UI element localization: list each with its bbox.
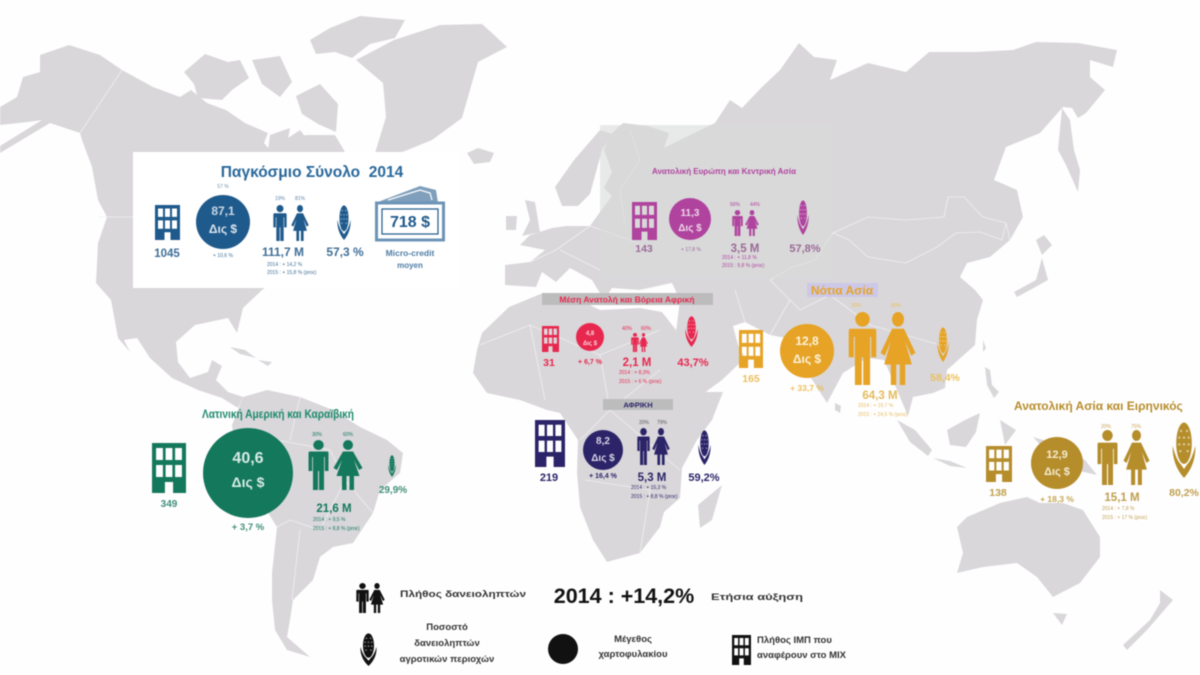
panel: Africa: 219 (540, 472, 558, 484)
panel: global total 2014: + 10,6 % (213, 253, 233, 259)
panel: South Asia: 20% (851, 303, 862, 309)
map: Arctic islands (184, 16, 405, 152)
portfolio circle: 87,1 (211, 204, 235, 218)
icon: building (542, 326, 559, 352)
panel: global total 2014: 57,3 % (326, 245, 364, 259)
portfolio circle: 8,2 (596, 436, 610, 447)
panel: Africa: 20% (639, 420, 650, 426)
panel: Africa: 59,2% (688, 472, 720, 484)
legend: portfolio size: χαρτοφυλακίου (599, 649, 668, 660)
panel: global total 2014: moyen (397, 261, 423, 270)
panel: South Asia: 58,4% (930, 372, 961, 384)
panel: East Asia and Pacific: 80,2% (1169, 487, 1200, 499)
icon: borrowers (732, 210, 759, 236)
map: Japan (1014, 235, 1052, 297)
legend: rural share: δανειοληπτών (414, 638, 480, 649)
panel: Africa: + 16,4 % (589, 473, 618, 480)
icon: building (986, 446, 1012, 482)
panel: global total 2014 (133, 152, 460, 288)
map: Greenland (356, 24, 507, 153)
portfolio circle: Δις $ (209, 222, 237, 236)
panel: Eastern Europe and Central Asia: 2014 : + 11,8 % (722, 255, 757, 261)
portfolio circle: 40,6 (232, 450, 264, 467)
panel: South Asia: 80% (891, 303, 902, 309)
legend: portfolio size (548, 634, 668, 664)
portfolio circle (196, 195, 250, 249)
panel: Latin America and Caribbean: 60% (343, 432, 354, 438)
panel: Africa: 5,3 M (638, 472, 666, 484)
icon: borrowers (273, 205, 309, 241)
legend: number of institutions (732, 635, 847, 665)
panel: Eastern Europe and Central Asia: 143 (635, 243, 653, 255)
portfolio circle: 12,9 (1046, 449, 1068, 461)
portfolio circle: Δις $ (793, 352, 821, 366)
panel: East Asia and Pacific: + 18,3 % (1040, 494, 1074, 504)
map: New Zealand (1123, 590, 1173, 650)
icon: building (155, 205, 180, 240)
heading: Ανατολική Ευρώπη και Κεντρική Ασία (652, 167, 796, 176)
portfolio circle (576, 323, 604, 351)
icon: corn (1173, 423, 1195, 478)
legend: borrowers (356, 583, 526, 613)
panel: Eastern Europe and Central Asia: 2015 : 9,8 % (proε) (722, 263, 765, 269)
icon: building (632, 202, 657, 240)
panel: Latin America and Caribbean: 21,6 M (316, 503, 352, 515)
panel: Latin America and Caribbean: 30% (312, 432, 323, 438)
panel: South Asia: 2015 : + 24,5 % (proε) (858, 412, 908, 418)
heading: Ανατολική Ασία και Ειρηνικός (1014, 399, 1183, 413)
panel: Latin America and Caribbean: + 3,7 % (232, 522, 265, 533)
panel: Middle East and North Africa: 60% (641, 326, 652, 332)
legend: rural share: αγροτικών περιοχών (400, 654, 494, 665)
portfolio circle: 11,3 (681, 208, 700, 219)
portfolio circle (1031, 437, 1083, 489)
map: Madagascar (698, 485, 722, 528)
heading bar: Μέση Ανατολή και Βόρεια Αφρική (559, 294, 695, 304)
legend: rural share: Ποσοστό (426, 622, 468, 633)
panel: East Asia and Pacific: 75% (1131, 424, 1142, 430)
panel: Africa (535, 399, 720, 500)
map: New Guinea (1033, 437, 1097, 475)
portfolio circle: 4,8 (586, 331, 595, 337)
portfolio circle: Δις $ (591, 453, 615, 464)
map: South America (232, 390, 403, 657)
panel: Middle East and North Africa (542, 293, 713, 385)
icon: building (152, 443, 186, 493)
icon: banknotes (376, 186, 444, 240)
panel: East Asia and Pacific: 20% (1101, 424, 1112, 430)
panel: global total 2014: 81% (295, 196, 306, 202)
panel: Latin America and Caribbean: 2014 : + 9,5 % (313, 517, 346, 523)
icon: banknotes: 718 $ (390, 214, 430, 231)
panel: global total 2014: 111,7 M (262, 245, 304, 259)
panel: East Asia and Pacific: 2014 : + 7,8 % (1102, 506, 1135, 512)
legend (356, 583, 847, 666)
panel: Middle East and North Africa: 2015 : + 6 % (proε) (619, 379, 662, 385)
panel: Latin America and Caribbean: 29,9% (379, 485, 407, 496)
panel: global total 2014: 19% (275, 196, 286, 202)
panel: Middle East and North Africa: + 6,7 % (578, 359, 603, 366)
panel: Eastern Europe and Central Asia: 57,8% (789, 243, 821, 255)
icon: borrowers (309, 440, 362, 490)
panel: global total 2014: 57 % (217, 184, 229, 190)
panel: East Asia and Pacific: 15,1 M (1104, 492, 1140, 504)
map: Scandinavia (555, 130, 612, 206)
panel: global total 2014: Micro-credit (386, 248, 434, 258)
panel: Africa: 2015 : + 8,8 % (proε) (631, 494, 678, 500)
panel: Middle East and North Africa: 2,1 M (623, 357, 651, 369)
heading: global total: Παγκόσμιο Σύνολο 2014 (221, 164, 404, 181)
map: Tasmania (1053, 613, 1067, 625)
panel: Latin America and Caribbean: 349 (161, 499, 178, 510)
map: Australia (957, 497, 1100, 597)
panel: South Asia (739, 283, 961, 418)
legend: portfolio size: Μέγεθος (614, 634, 652, 645)
panel: East Asia and Pacific (986, 399, 1200, 521)
icon: borrowers (849, 312, 915, 385)
map: Philippines (985, 367, 999, 398)
panel: Eastern Europe and Central Asia: 44% (750, 202, 761, 208)
portfolio circle: Δις $ (678, 223, 702, 234)
heading bar (542, 293, 713, 305)
legend: borrowers: Πλήθος δανειοληπτών (400, 589, 526, 600)
panel: South Asia: 165 (742, 373, 760, 385)
map: Iceland (467, 148, 494, 164)
panel: East Asia and Pacific: 138 (989, 487, 1007, 499)
faint overlay of the Eastern Europe panel (600, 125, 832, 278)
icon: corn (685, 316, 698, 347)
panel: global total 2014: 2014 : + 14,2 % (267, 262, 303, 268)
panel: Latin America and Caribbean: 2015 : + 8,8 % (proε) (313, 526, 360, 532)
panel: Eastern Europe and Central Asia: + 17,8 % (681, 247, 701, 253)
legend: rural share (360, 622, 494, 666)
map: Britain and Ireland (506, 200, 540, 236)
portfolio circle: Δις $ (583, 341, 598, 347)
portfolio circle (583, 430, 623, 470)
icon: borrowers (637, 428, 670, 465)
panel: Eastern Europe and Central Asia (632, 167, 821, 269)
icon: corn (388, 455, 396, 477)
panel: South Asia: 64,3 M (862, 390, 898, 402)
panel: South Asia: + 33,7 % (790, 383, 824, 393)
panel: Middle East and North Africa: 2014 : + 8,3% (619, 370, 651, 376)
map: Africa (473, 293, 723, 562)
heading: Λατινική Αμερική και Καραϊβική (202, 407, 354, 421)
portfolio circle: Δις $ (232, 474, 265, 490)
panel: Middle East and North Africa: 31 (543, 357, 555, 369)
panel: South Asia: 2014 : + 19,7 % (858, 403, 894, 409)
legend: annual growth label: Ετήσια αύξηση (711, 592, 803, 603)
portfolio circle (780, 324, 834, 378)
map: Sakhalin (1058, 108, 1080, 192)
legend: number of institutions: αναφέρουν στο ΜΙΧ (757, 650, 847, 661)
icon: corn (797, 200, 809, 235)
heading bar: ΑΦΡΙΚΗ (623, 400, 653, 410)
map: Sri Lanka and Taiwan (835, 340, 986, 413)
icon: corn (937, 327, 949, 362)
number of institutions: 1045 (154, 248, 180, 260)
portfolio circle (669, 198, 711, 240)
legend: number of institutions: Πλήθος ΙΜΠ που (757, 635, 832, 646)
portfolio circle (203, 428, 293, 518)
icon: building (535, 420, 565, 467)
panel: Eastern Europe and Central Asia: 3,5 M (731, 243, 759, 255)
panel: Africa: 79% (657, 420, 668, 426)
panel: Africa: 2014 : + 15,3 % (631, 485, 667, 491)
icon: building (739, 330, 763, 368)
icon: borrowers (1098, 430, 1150, 485)
legend: annual growth figure: 2014 : +14,2% (554, 584, 694, 608)
panel: global total 2014: 2015 : + 15,8 % (proε) (267, 270, 317, 276)
map: North America (0, 45, 400, 408)
panel: East Asia and Pacific: 2015 : + 17 % (proε) (1102, 515, 1148, 521)
map: Caribbean islands (230, 347, 272, 366)
panel: Eastern Europe and Central Asia: 56% (730, 202, 741, 208)
icon: corn (698, 430, 711, 465)
heading bar (603, 399, 673, 410)
portfolio circle: Δις $ (1044, 466, 1070, 478)
panel: Middle East and North Africa: 40% (622, 326, 633, 332)
map: Sumatra, Java, Borneo (897, 413, 1016, 468)
heading: Νότια Ασία (811, 284, 874, 298)
map: Eurasia (505, 42, 1117, 416)
panel: Latin America and Caribbean (152, 407, 407, 533)
panel: Middle East and North Africa: 43,7% (677, 357, 709, 369)
icon: corn (337, 205, 351, 240)
portfolio circle: 12,8 (795, 334, 819, 348)
icon: borrowers (631, 333, 648, 352)
